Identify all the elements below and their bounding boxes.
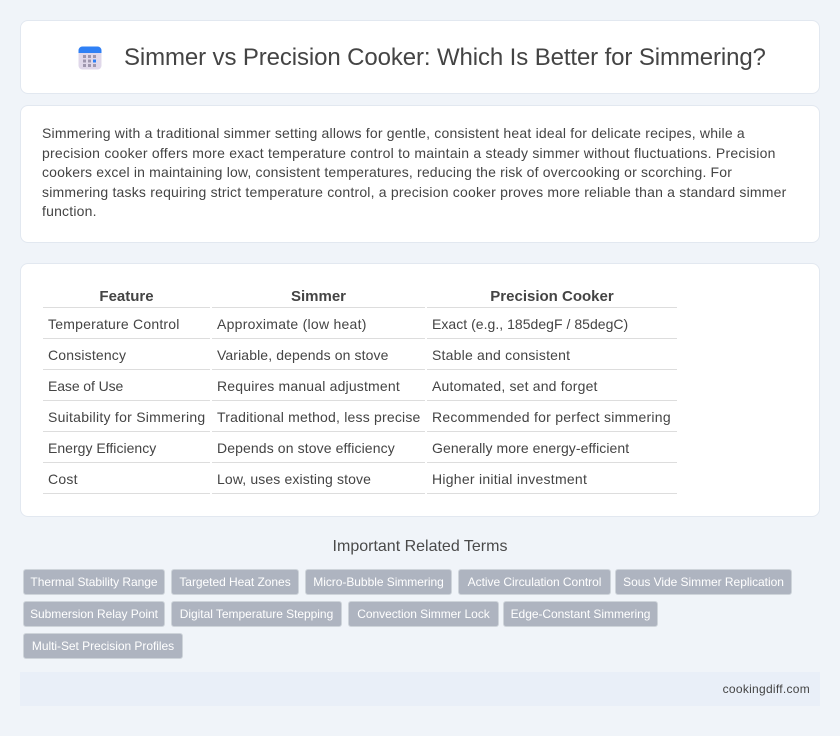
comparison table: Precision Cooker (490, 288, 614, 305)
related term tags: Multi-Set Precision Profiles (32, 639, 174, 653)
comparison table: Feature (99, 288, 154, 305)
related term tags: Micro-Bubble Simmering (313, 575, 444, 589)
comparison table: Higher initial investment (432, 471, 587, 487)
comparison table: Low, uses existing stove (217, 471, 371, 487)
comparison table: Stable and consistent (432, 347, 570, 363)
summary text: cookers excel in maintaining low, consistent temperatures, reducing the risk of overcooking or scorching. For (42, 164, 732, 180)
related term tags: Submersion Relay Point (30, 607, 158, 621)
comparison table: Cost (48, 471, 78, 487)
comparison table: Simmer (291, 288, 346, 305)
related term tags: Edge-Constant Simmering (511, 607, 650, 621)
related term tags: Active Circulation Control (468, 575, 601, 589)
comparison table: Exact (e.g., 185degF / 85degC) (432, 316, 628, 332)
panel: header (20, 20, 820, 94)
comparison table: Depends on stove efficiency (217, 440, 395, 456)
comparison table: Traditional method, less precise (217, 409, 421, 425)
related term tags: Targeted Heat Zones (179, 575, 291, 589)
comparison table: Automated, set and forget (432, 378, 598, 394)
panel: comparison table (20, 263, 820, 517)
comparison table: Suitability for Simmering (48, 409, 205, 425)
footer credit: cookingdiff.com (723, 682, 810, 696)
comparison table: Consistency (48, 347, 126, 363)
summary text: precision cooker offers more exact temperature control to maintain a steady simmer without fluctuations. Precision (42, 145, 776, 161)
related term tags: Digital Temperature Stepping (180, 607, 333, 621)
panel: summary (20, 105, 820, 243)
related term tags (23, 569, 792, 659)
related term tags: Thermal Stability Range (30, 575, 158, 589)
summary text: simmering tasks requiring strict temperature control, a precision cooker proves more reliable than a standard simmer (42, 184, 786, 200)
heading: related terms: Important Related Terms (333, 538, 507, 555)
comparison table (43, 288, 677, 494)
summary text: Simmering with a traditional simmer setting allows for gentle, consistent heat ideal for delicate recipes, while a (42, 125, 745, 141)
comparison table: Recommended for perfect simmering (432, 409, 671, 425)
comparison table: Requires manual adjustment (217, 378, 400, 394)
icon: calendar (78, 46, 102, 70)
related term tags: Convection Simmer Lock (357, 607, 490, 621)
related term tags: Sous Vide Simmer Replication (623, 575, 784, 589)
comparison table: Generally more energy-efficient (432, 440, 629, 456)
footer (20, 672, 820, 706)
comparison table: Approximate (low heat) (217, 316, 367, 332)
comparison table: Variable, depends on stove (217, 347, 388, 363)
title: Simmer vs Precision Cooker: Which Is Better for Simmering? (124, 44, 766, 71)
comparison table: Ease of Use (48, 378, 123, 394)
summary text: function. (42, 203, 97, 219)
summary text (42, 125, 786, 219)
comparison table: Temperature Control (48, 316, 180, 332)
comparison table: Energy Efficiency (48, 440, 156, 456)
